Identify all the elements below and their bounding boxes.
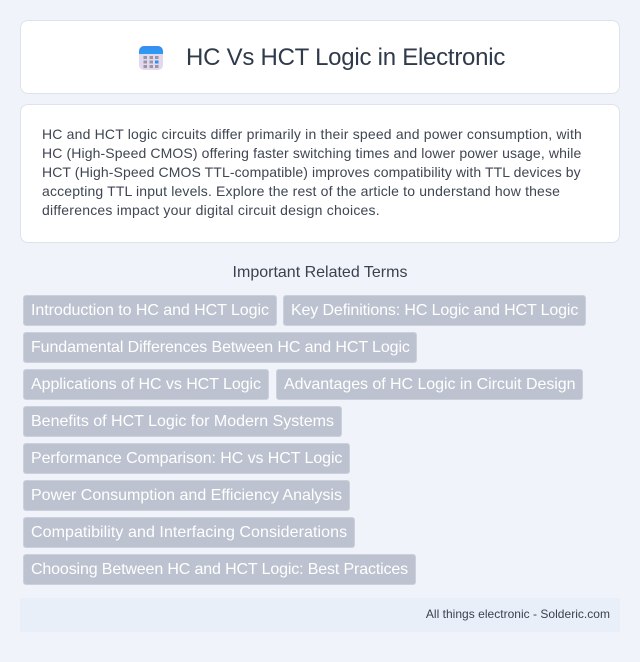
title: HC Vs HCT Logic in Electronic xyxy=(186,44,505,71)
tag: Key Definitions: HC Logic and HCT Logic xyxy=(291,302,578,319)
footer bar: All things electronic - Solderic.com xyxy=(426,607,610,621)
tag: Advantages of HC Logic in Circuit Design xyxy=(284,376,575,393)
text block: intro paragraph: accepting TTL input levels. Explore the rest of the article to understand how these xyxy=(42,183,560,199)
tag: Introduction to HC and HCT Logic xyxy=(31,302,269,319)
panel: title card xyxy=(20,20,620,94)
tag: Compatibility and Interfacing Considerations xyxy=(31,524,347,541)
tag: Benefits of HCT Logic for Modern Systems xyxy=(31,413,334,430)
tag xyxy=(23,517,355,548)
text block: intro paragraph: HCT (High-Speed CMOS TTL-compatible) improves compatibility with TTL devices by xyxy=(42,164,581,180)
heading: related terms: Important Related Terms xyxy=(233,264,407,281)
tag xyxy=(23,443,350,474)
tag xyxy=(23,554,416,585)
text block: intro paragraph: differences impact your digital circuit design choices. xyxy=(42,202,380,218)
tag: Power Consumption and Efficiency Analysis xyxy=(31,487,342,504)
icon: calendar grid xyxy=(139,46,163,70)
tag xyxy=(23,332,417,363)
tag xyxy=(23,406,342,437)
tag xyxy=(23,369,269,400)
tag list xyxy=(23,295,586,585)
tag xyxy=(23,295,277,326)
tag: Applications of HC vs HCT Logic xyxy=(31,376,261,393)
text block: intro paragraph: HC (High-Speed CMOS) offering faster switching times and lower power usage, while xyxy=(42,145,581,161)
text block: intro paragraph: HC and HCT logic circuits differ primarily in their speed and power consumption, with xyxy=(42,126,582,142)
footer bar xyxy=(20,598,620,632)
tag: Fundamental Differences Between HC and HCT Logic xyxy=(31,339,410,356)
tag: Choosing Between HC and HCT Logic: Best Practices xyxy=(31,561,408,578)
text block: intro paragraph xyxy=(42,126,582,218)
tag xyxy=(283,295,586,326)
tag: Performance Comparison: HC vs HCT Logic xyxy=(31,450,342,467)
tag xyxy=(23,480,350,511)
tag xyxy=(276,369,583,400)
panel: intro text xyxy=(20,104,620,243)
